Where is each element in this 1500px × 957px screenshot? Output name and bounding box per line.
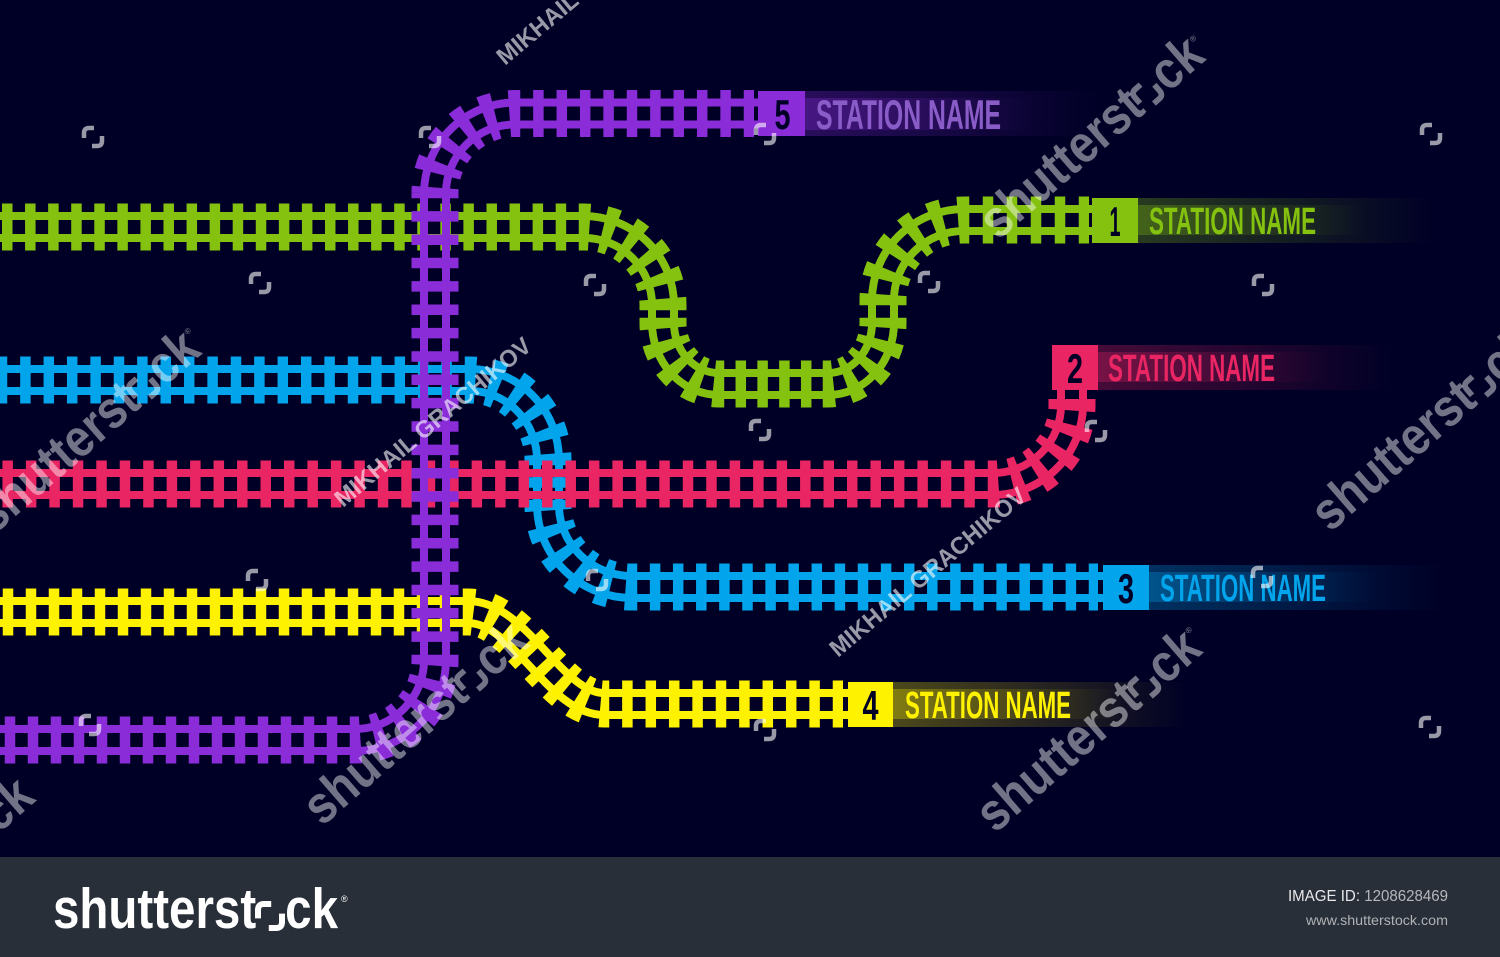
- label 3 inner band: [1149, 572, 1379, 602]
- label 5 number box: [758, 91, 805, 136]
- watermark: shutterstock lower right: shutterstock: [964, 617, 1212, 843]
- label 1 glow band: [1138, 198, 1433, 243]
- label 1 number box: [1092, 198, 1138, 243]
- green rails: [0, 220, 1092, 384]
- track: purple line to station 5: [0, 114, 758, 740]
- station label 4: [848, 682, 1188, 729]
- label 3 glow band: [1149, 565, 1444, 610]
- label 4 number: 4: [862, 682, 879, 729]
- label 2 inner band: [1098, 352, 1328, 382]
- yellow rails: [0, 612, 848, 704]
- watermark: author name centre right: MIKHAIL GRACHIKOV: [825, 483, 1032, 663]
- watermark: shutterstock top right: ®: [1188, 33, 1198, 44]
- small watermark icons: [81, 125, 1440, 739]
- footer logo: ®: [341, 894, 348, 904]
- track: red line to station 2: [0, 390, 1072, 484]
- label 5 glow band: [805, 91, 1100, 136]
- purple sleepers: [0, 114, 754, 740]
- red sleepers: [0, 399, 1072, 484]
- track: blue line to station 3: [0, 380, 1103, 587]
- label 2 number box: [1052, 345, 1098, 390]
- label 3 number box: [1103, 565, 1149, 610]
- label 3 name: STATION NAME: [1160, 568, 1326, 610]
- blue sleepers: [0, 380, 1098, 587]
- yellow sleepers: [0, 612, 843, 704]
- station label 5: [758, 91, 1100, 138]
- purple rails: [0, 114, 758, 740]
- watermark: author name centre left: MIKHAIL GRACHIKOV: [330, 333, 537, 513]
- station label 1: [1092, 198, 1433, 245]
- red rails: [0, 390, 1072, 484]
- label 2 name: STATION NAME: [1108, 348, 1275, 390]
- label 3 number: 3: [1118, 565, 1134, 612]
- watermark: shutterstock lower right: ®: [1184, 625, 1194, 636]
- label 4 number box: [848, 682, 893, 727]
- watermark: shutterstock far left: ®: [183, 326, 193, 337]
- label 2 glow band: [1098, 345, 1393, 390]
- station label 3: [1103, 565, 1444, 612]
- label 1 inner band: [1138, 205, 1368, 235]
- blue rails: [0, 380, 1103, 587]
- website: www.shutterstock.com: [1305, 912, 1448, 928]
- label 2 number: 2: [1067, 345, 1083, 392]
- label 4 glow band: [893, 682, 1188, 727]
- green sleepers: [0, 220, 1089, 384]
- watermark: shutterstock top right: shutterstock: [967, 24, 1215, 250]
- track: yellow line to station 4: [0, 612, 848, 704]
- label 5 number: 5: [774, 91, 790, 138]
- station label 1: 1: [1110, 198, 1120, 245]
- label 5 name: STATION NAME: [816, 91, 1001, 138]
- label 5 inner band: [805, 98, 1035, 130]
- footer logo: shutterstock: [53, 877, 338, 941]
- footer background: [0, 857, 1500, 957]
- image id: IMAGE ID: 1208628469: [1288, 888, 1448, 905]
- label 4 inner band: [893, 689, 1123, 719]
- label 1 name: STATION NAME: [1149, 201, 1316, 243]
- track: green line to station 1: [0, 220, 1092, 384]
- label 4 name: STATION NAME: [905, 685, 1071, 727]
- station label 2: [1052, 345, 1393, 392]
- footer bar: [0, 857, 1500, 957]
- watermark: shutterstock lower centre: shutterstock: [291, 610, 539, 836]
